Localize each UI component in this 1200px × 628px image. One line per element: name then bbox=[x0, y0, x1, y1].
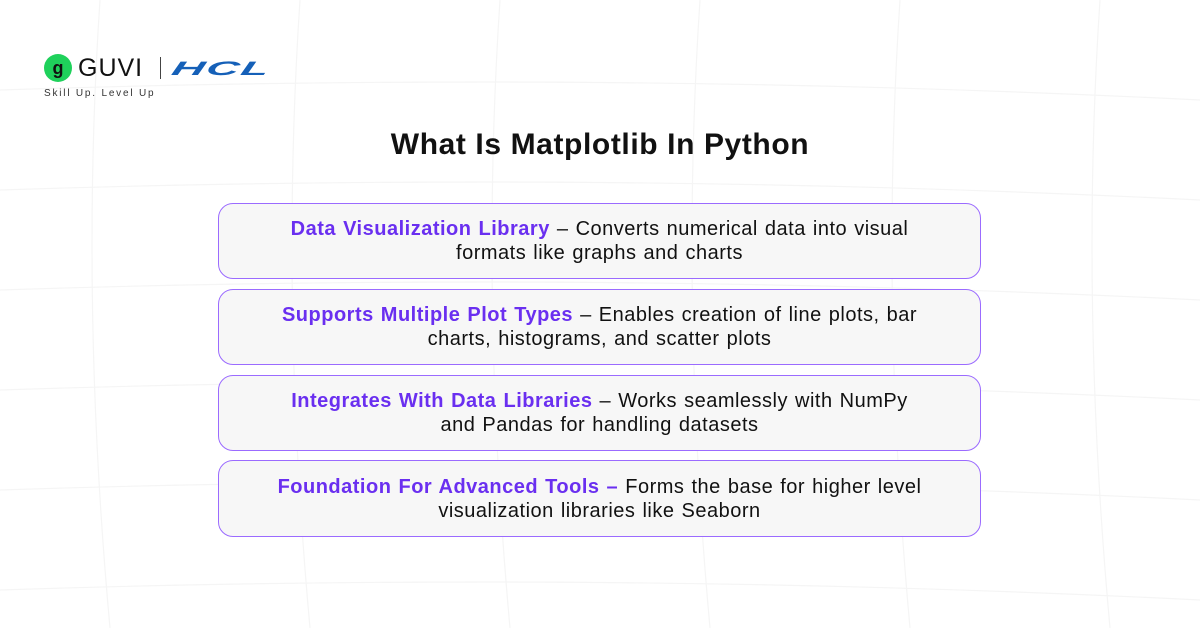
card 2 bbox=[218, 289, 981, 365]
logo bbox=[44, 54, 274, 99]
tagline: Skill Up. Level Up bbox=[44, 88, 155, 99]
title: What Is Matplotlib In Python bbox=[391, 128, 809, 161]
card 4: Foundation For Advanced Tools – Forms the base for higher level bbox=[278, 476, 921, 498]
card 1: formats like graphs and charts bbox=[456, 242, 743, 264]
card 3 bbox=[218, 375, 981, 451]
icon: guvi: g bbox=[52, 58, 64, 78]
card 3: and Pandas for handling datasets bbox=[440, 414, 758, 436]
card 1 bbox=[218, 203, 981, 279]
card 1: Data Visualization Library – Converts numerical data into visual bbox=[291, 218, 908, 240]
card 2: charts, histograms, and scatter plots bbox=[428, 328, 771, 350]
hcl text: HCL bbox=[169, 57, 274, 79]
card 4 bbox=[218, 460, 981, 537]
card 2: Supports Multiple Plot Types – Enables creation of line plots, bar bbox=[282, 304, 917, 326]
card 3: Integrates With Data Libraries – Works seamlessly with NumPy bbox=[291, 390, 908, 412]
guvi text: GUVI bbox=[78, 54, 143, 82]
icon: guvi bbox=[44, 54, 72, 82]
card 4: visualization libraries like Seaborn bbox=[438, 500, 761, 522]
